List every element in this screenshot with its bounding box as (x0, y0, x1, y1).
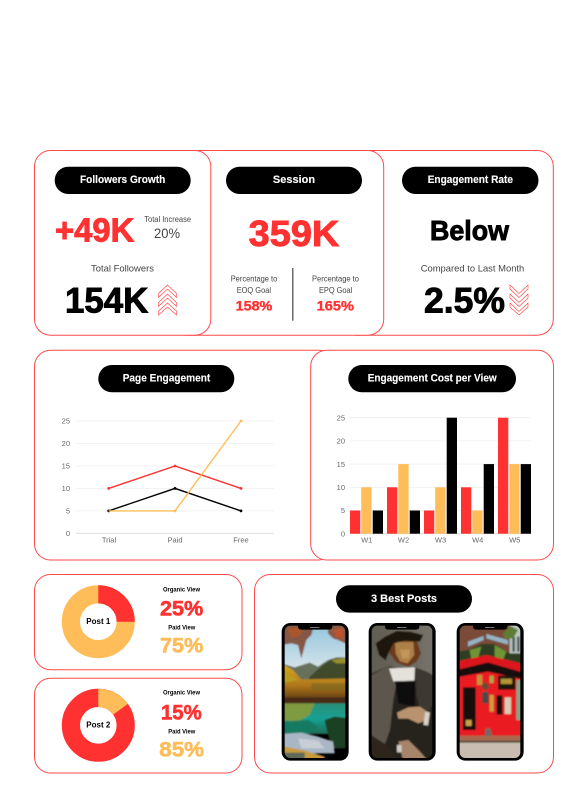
label: total followers: Total Followers (91, 263, 154, 274)
line chart (62, 417, 274, 545)
pill heading: session (226, 167, 362, 194)
bar chart: W2 (398, 536, 409, 545)
line chart: 0 (66, 529, 70, 538)
panel: session (170, 150, 384, 335)
phone: renaissance portrait (368, 622, 436, 761)
line chart: 25 (62, 417, 70, 426)
line chart: Trial (102, 536, 116, 545)
block: EPQ goal: EPQ Goal (319, 286, 353, 295)
pill heading: engagement rate (402, 167, 538, 194)
pill heading: 3 best posts (336, 585, 472, 613)
value: 2.5 percent: 2.5% (424, 282, 505, 321)
bar chart: 25 (337, 413, 345, 422)
pill heading: followers growth: Followers Growth (80, 174, 166, 186)
panel: 3 best posts (254, 574, 554, 773)
panel: post 2 (34, 678, 242, 773)
stats: post 2: 15% (161, 701, 202, 725)
stats: post 1: Organic View (163, 587, 200, 594)
bar chart: W3 (435, 536, 446, 545)
donut chart: post 1 (71, 594, 126, 649)
panel: followers growth (34, 150, 211, 335)
block: EOQ goal: 158% (236, 297, 273, 313)
line chart: 20 (62, 439, 70, 448)
bar chart: W5 (509, 536, 520, 545)
phone: red pub facade (456, 622, 524, 761)
value: +49K: +49K (55, 211, 134, 248)
icon: triple up chevrons (158, 285, 176, 315)
block: EPQ goal: Percentage to (312, 275, 360, 284)
pill heading: engagement cost per view: Engagement Cost per View (368, 373, 497, 385)
bar chart: 15 (337, 460, 345, 469)
panel: engagement rate (340, 150, 553, 335)
stats: post 1 (160, 587, 203, 657)
value: 359K: 359K (249, 213, 339, 254)
block: EPQ goal: 165% (317, 297, 355, 313)
stats: post 2: Organic View (163, 690, 200, 697)
label: total increase: Total Increase (144, 215, 192, 224)
line chart: 15 (62, 462, 70, 471)
bar chart: W4 (472, 536, 483, 545)
value: below: Below (430, 215, 509, 246)
stats: post 2 (159, 690, 204, 761)
block: EOQ goal (231, 275, 278, 313)
line chart: Paid (167, 536, 183, 545)
pill heading: page engagement (98, 365, 234, 392)
stats: post 2: Paid View (168, 729, 195, 736)
stats: post 1: 25% (160, 596, 203, 620)
panel: post 1 (34, 574, 242, 670)
icon: triple down chevrons (510, 285, 528, 315)
pill heading: followers growth (55, 167, 191, 194)
pill heading: session: Session (273, 174, 315, 186)
bar chart: 0 (341, 529, 345, 538)
line chart: Free (233, 536, 249, 545)
stats: post 2: 85% (159, 737, 204, 761)
line chart: 5 (66, 507, 70, 516)
pill heading: engagement rate: Engagement Rate (428, 174, 513, 186)
label: compared to last month: Compared to Last Month (421, 263, 524, 274)
stats: post 1: Paid View (168, 625, 195, 632)
value: 154K: 154K (65, 282, 148, 321)
block: EOQ goal: Percentage to (231, 275, 278, 284)
block: EPQ goal (312, 275, 360, 313)
donut chart: post 2: Post 2 (86, 721, 111, 730)
bar chart: 5 (341, 506, 345, 515)
pill heading: engagement cost per view (348, 365, 516, 392)
bar chart: W1 (361, 536, 372, 545)
pill heading: page engagement: Page Engagement (123, 373, 211, 385)
panel: page engagement (34, 350, 334, 560)
donut chart: post 2 (71, 698, 126, 753)
pill heading: 3 best posts: 3 Best Posts (371, 593, 437, 605)
bar chart: 10 (337, 483, 345, 492)
stats: post 1: 75% (160, 633, 203, 657)
line chart: 10 (62, 484, 70, 493)
panel: engagement cost per view (311, 350, 554, 560)
bar chart: 20 (337, 437, 345, 446)
block: EOQ goal: EOQ Goal (237, 286, 271, 295)
donut chart: post 1: Post 1 (86, 617, 111, 626)
bar chart (337, 413, 531, 545)
phone: lake landscape (281, 622, 349, 762)
value: 20 percent: 20% (154, 226, 180, 241)
